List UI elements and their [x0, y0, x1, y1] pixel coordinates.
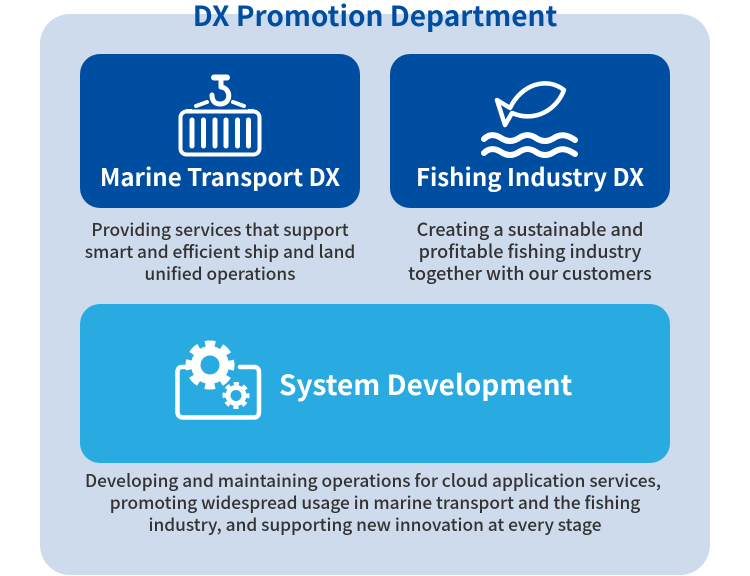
heading: Marine Transport DX: [100, 158, 340, 193]
text: system development description: industry, and supporting new innovation at every stage: [148, 511, 602, 536]
text: marine transport description: [85, 216, 355, 285]
icon: fish over waves: [481, 81, 578, 158]
text: system development description: promoting widespread usage in marine transport and the fishing: [110, 489, 640, 514]
text: marine transport description: smart and efficient ship and land: [85, 238, 355, 263]
text: fishing industry description: together with our customers: [408, 260, 652, 286]
icon: gears in window: [175, 340, 262, 420]
text: fishing industry description: profitable fishing industry: [419, 238, 641, 264]
text: system development description: Developing and maintaining operations for cloud application services,: [85, 467, 661, 492]
text: marine transport description: Providing services that support: [91, 216, 349, 241]
text: fishing industry description: [408, 216, 652, 286]
text: marine transport description: unified operations: [144, 260, 296, 285]
text: fishing industry description: Creating a sustainable and: [417, 216, 643, 242]
text: system development description: [85, 467, 661, 536]
heading: Fishing Industry DX: [416, 158, 644, 193]
panel: fishing industry DX: [390, 54, 670, 208]
panel: marine transport DX: [80, 54, 360, 208]
heading: System Development: [279, 364, 572, 404]
panel: system development: [80, 304, 670, 463]
icon: container on crane hook: [178, 74, 262, 156]
